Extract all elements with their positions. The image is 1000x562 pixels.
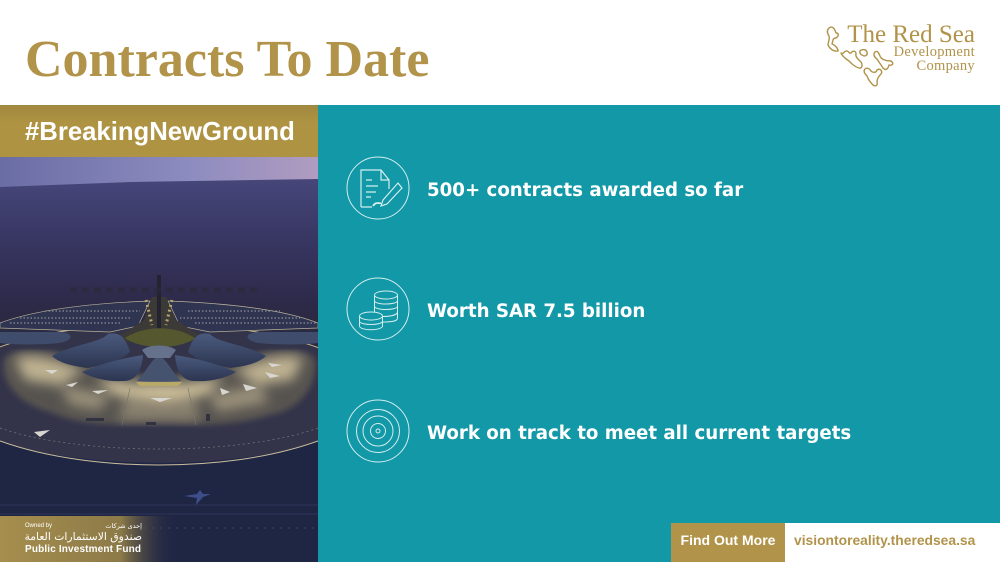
runway lights [0, 428, 318, 449]
item 3: targets [346, 400, 851, 462]
solar fields [0, 301, 318, 332]
find out more button: Find Out More [681, 532, 775, 548]
icon: concentric target [346, 400, 410, 462]
text: Work on track to meet all current targets [427, 423, 851, 444]
palm avenue [70, 275, 260, 350]
icon: document and pen [346, 156, 410, 220]
text: 500+ contracts awarded so far [427, 180, 743, 201]
lower field [0, 441, 318, 562]
logo subtext [894, 44, 975, 74]
website url: visiontoreality.theredsea.sa [794, 532, 975, 548]
main terminal roofs [52, 333, 266, 382]
hashtag text: #BreakingNewGround [25, 118, 295, 146]
logo text: The Red Sea [847, 21, 975, 48]
item 1: contracts [346, 156, 744, 220]
arabic owned by: إحدى شركات [105, 522, 142, 530]
owner logo: Public Investment Fund [24, 522, 142, 555]
gold footer fade [0, 516, 318, 562]
aircraft on apron [34, 363, 282, 437]
logo: The Red Sea Development Company [826, 21, 975, 86]
text: Worth SAR 7.5 billion [427, 301, 645, 322]
icon: coral reef outline [826, 26, 894, 86]
find out more button [671, 523, 785, 562]
icon: coin stacks [346, 278, 410, 340]
hashtag banner [0, 105, 318, 157]
desert ground [0, 179, 318, 325]
small aircraft silhouette [184, 490, 211, 505]
sky [0, 157, 318, 187]
item 2: value [346, 278, 645, 340]
call to action bar [671, 523, 1000, 562]
owned by: Owned by [25, 523, 52, 529]
illuminated apron base [4, 351, 315, 425]
fund name: Public Investment Fund [25, 544, 141, 555]
logo subtext: Company [916, 58, 975, 74]
side terminals [0, 332, 318, 344]
apron glows [15, 356, 303, 420]
arabic fund name: صندوق الاستثمارات العامة [24, 530, 142, 543]
terminal light strip [136, 382, 182, 386]
panel: airport render image [0, 157, 318, 562]
outer runway loop [0, 324, 373, 466]
title: Contracts To Date [25, 31, 429, 88]
logo subtext: Development [894, 44, 975, 60]
panel: teal content [318, 105, 1000, 562]
airfield base [0, 325, 318, 562]
